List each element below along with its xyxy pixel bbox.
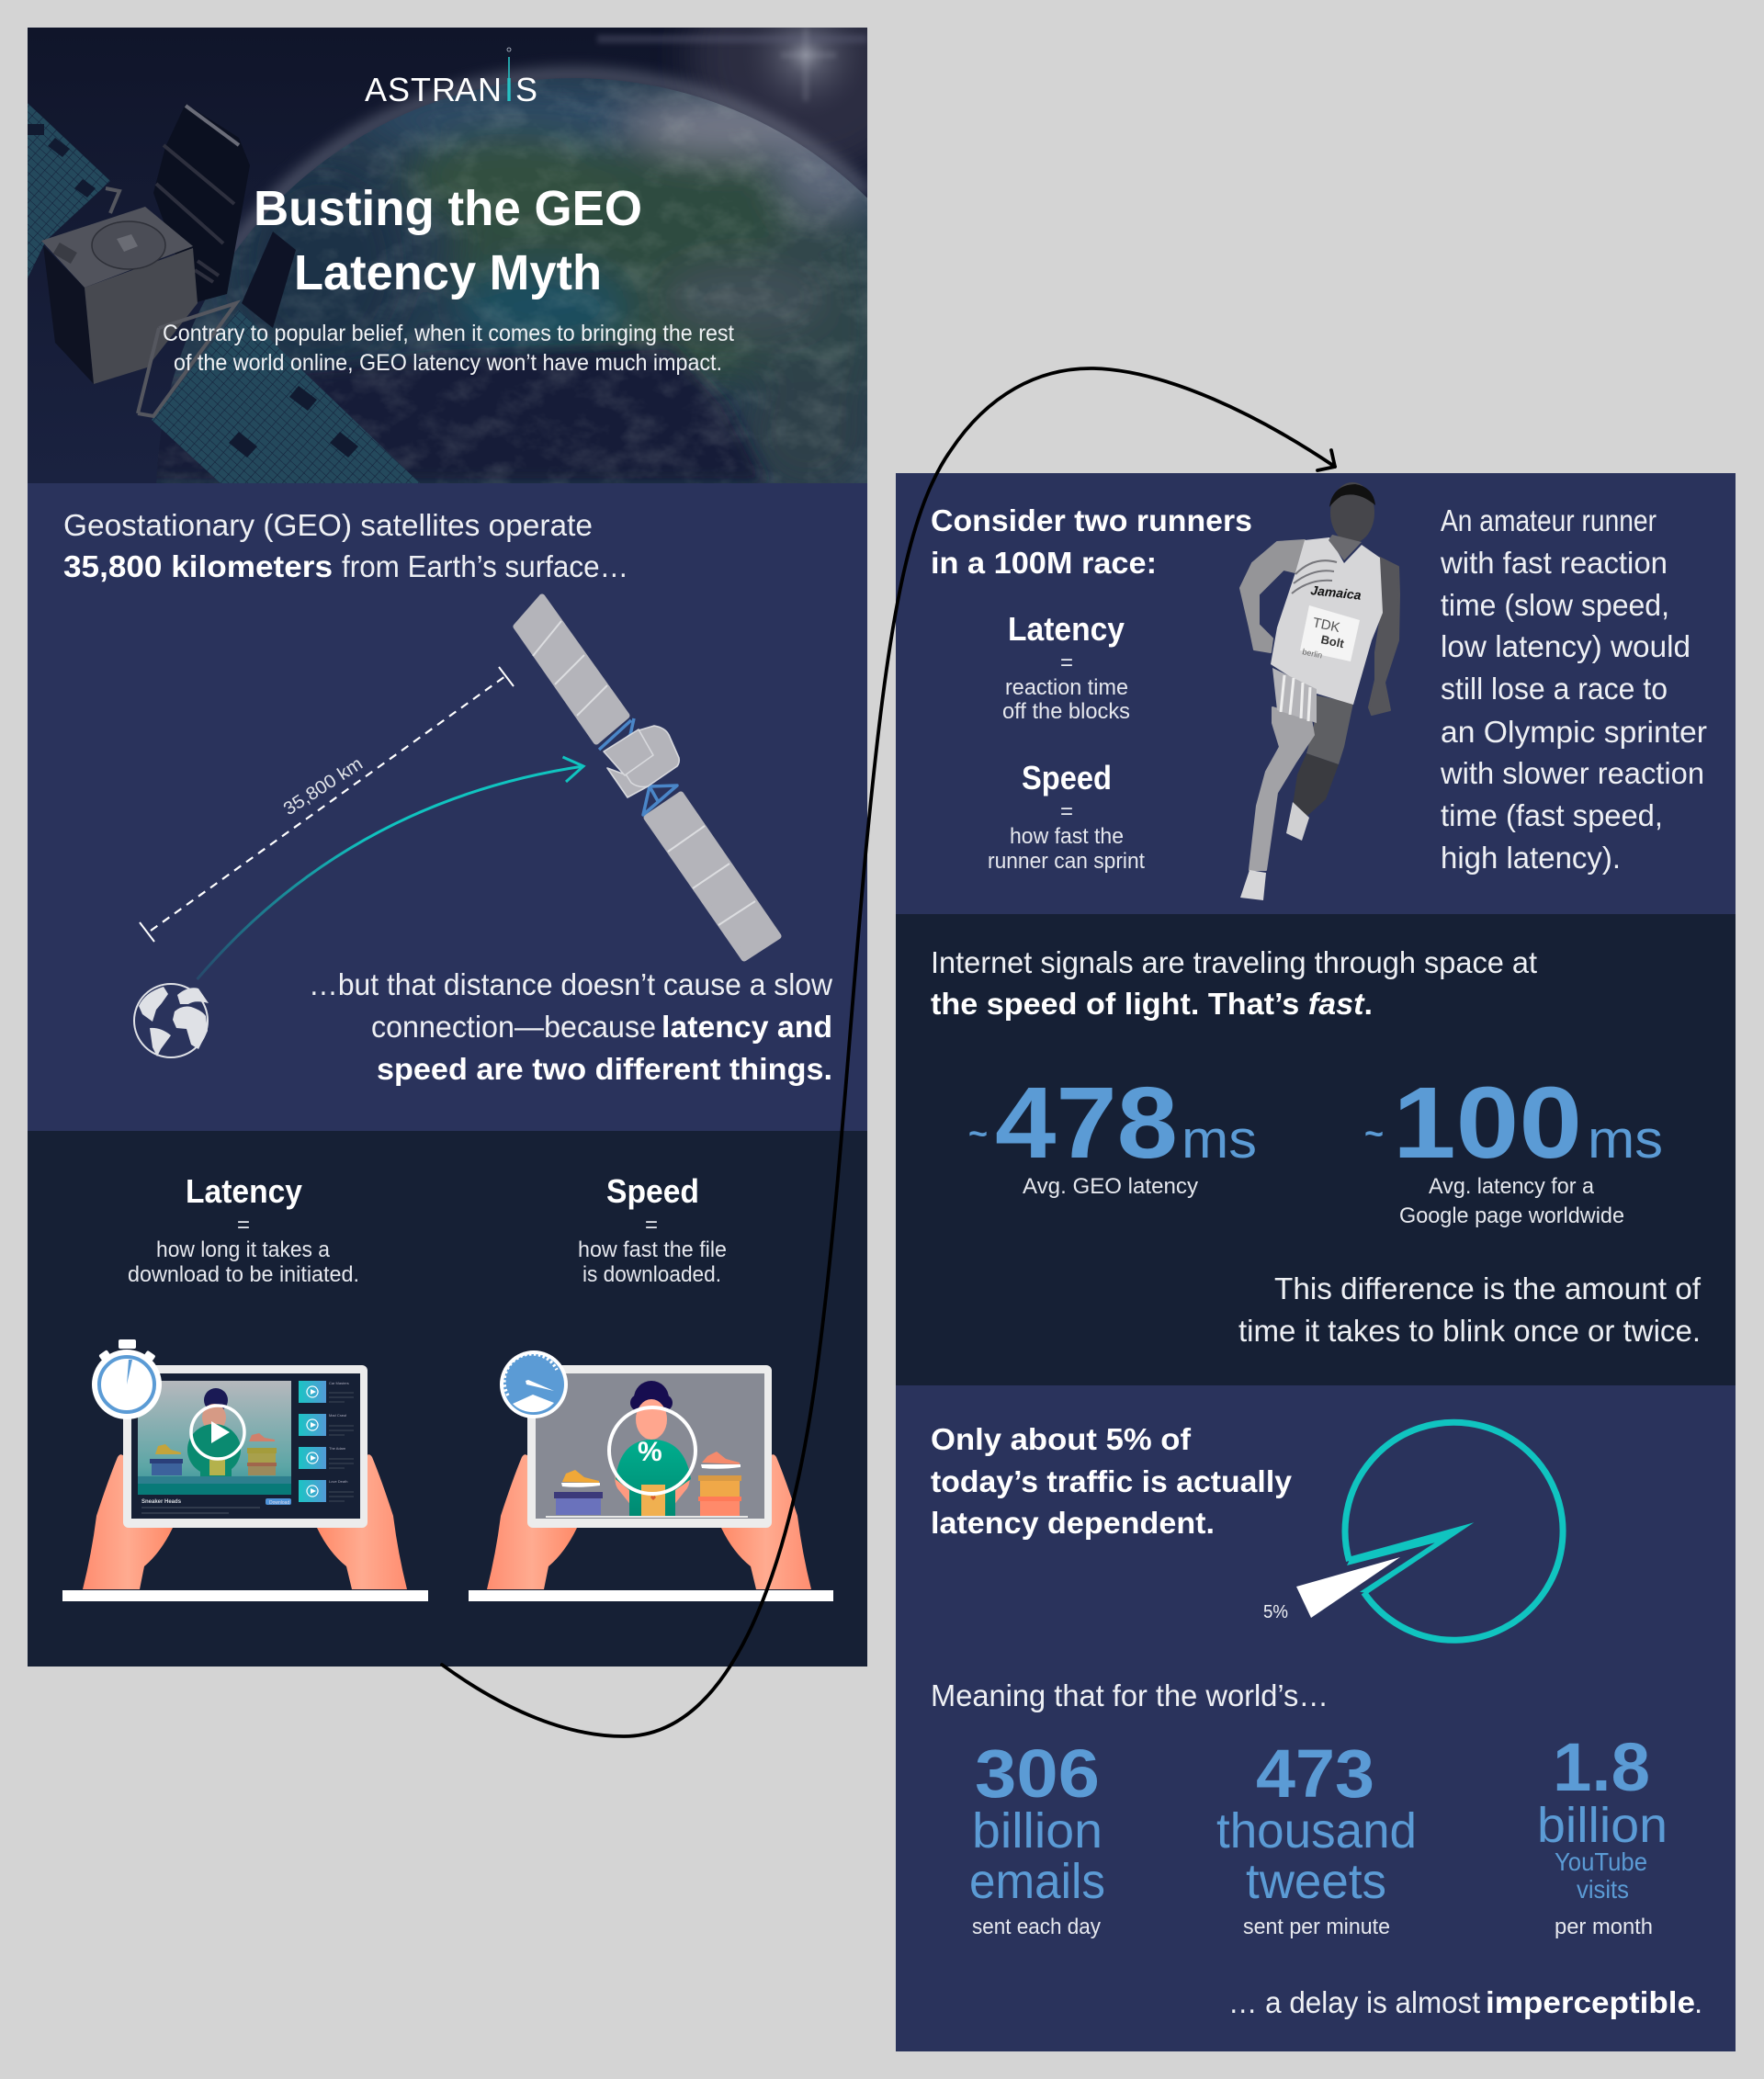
text: runner comparison: still lose a race to <box>1441 672 1668 706</box>
text: runner comparison: An amateur runner <box>1441 503 1657 537</box>
definition: runner speed: how fast the <box>1010 824 1124 849</box>
text: latency versus speed statement: connection—because <box>371 1010 656 1044</box>
heading: two runners: Consider two runners <box>931 503 1252 537</box>
chart: five percent pie <box>1263 1422 1563 1640</box>
stat: YouTube visits: visits <box>1577 1875 1629 1904</box>
text: runner comparison: with fast reaction <box>1440 546 1668 580</box>
icon: globe <box>134 984 209 1057</box>
stat: YouTube visits: per month <box>1555 1915 1653 1939</box>
definition: latency: how long it takes a <box>156 1237 331 1262</box>
race bib <box>1300 605 1360 661</box>
illustration: satellite in orbit <box>28 103 420 483</box>
stat: tweets: thousand <box>1216 1803 1417 1859</box>
definition: latency: = <box>237 1213 250 1237</box>
text: latency versus speed statement: speed are two different things. <box>377 1052 832 1086</box>
stat: Google latency: Avg. latency for a <box>1429 1174 1595 1199</box>
subtitle <box>163 321 734 376</box>
panel: speed of light <box>896 914 1736 1385</box>
heading: two runners <box>931 503 1252 580</box>
illustration: earth from orbit <box>156 28 867 483</box>
definition: runner latency <box>1002 610 1130 724</box>
subtitle: Contrary to popular belief, when it comes to bringing the rest <box>163 321 734 346</box>
video thumbnails: The Adam <box>329 1446 346 1451</box>
panel: traffic share <box>896 1385 1736 2051</box>
video thumbnails: Love Death <box>329 1479 347 1484</box>
text: traffic statement: latency dependent. <box>931 1506 1215 1540</box>
stat: GEO latency <box>968 1067 1257 1199</box>
text: conclusion <box>1228 1985 1702 2019</box>
text: meaning: Meaning that for the world’s… <box>931 1678 1329 1712</box>
panel: right column <box>896 473 1736 2051</box>
illustration: distance line <box>140 667 514 942</box>
race bib: berlin <box>1302 647 1323 661</box>
illustration: tablet with video and stopwatch <box>62 1339 428 1601</box>
video thumbnails: Car Masters <box>329 1381 349 1385</box>
definition: runner latency: = <box>1060 650 1073 675</box>
definition: runner speed: Speed <box>1022 759 1112 797</box>
text: latency versus speed statement: latency and <box>662 1010 832 1044</box>
panel: hero image <box>28 28 867 483</box>
text: runner comparison: low latency) would <box>1441 629 1690 663</box>
definition: runner latency: Latency <box>1008 610 1125 648</box>
definition: latency: download to be initiated. <box>128 1262 359 1287</box>
stat: emails: 306 <box>975 1735 1100 1812</box>
definition: runner speed: runner can sprint <box>988 849 1145 874</box>
video title row: Sneaker Heads <box>141 1499 182 1505</box>
stat: emails: sent each day <box>972 1915 1101 1939</box>
stat: GEO latency: 478 <box>995 1067 1178 1180</box>
panel: runner analogy <box>896 473 1736 914</box>
text: traffic statement <box>931 1422 1293 1540</box>
video thumbnails: Mad Crawl <box>329 1413 346 1418</box>
text: intro: 35,800 kilometers <box>63 549 333 583</box>
video person <box>150 1388 277 1476</box>
stat: GEO latency: Avg. GEO latency <box>1023 1174 1198 1199</box>
illustration: satellite <box>516 597 778 958</box>
text: traffic statement: today’s traffic is actually <box>931 1464 1293 1498</box>
title: Latency Myth <box>294 245 602 300</box>
stat: tweets: tweets <box>1246 1854 1386 1909</box>
text: speed of light: Internet signals are traveling through space at <box>931 945 1537 979</box>
stat: tweets: sent per minute <box>1243 1915 1390 1939</box>
definition: runner latency: off the blocks <box>1002 699 1130 724</box>
stat: GEO latency: ~ <box>968 1114 988 1152</box>
text: runner comparison <box>1440 503 1707 875</box>
stat: Google latency: Google page worldwide <box>1399 1203 1624 1228</box>
arrow: connector between columns <box>442 368 1335 1736</box>
logo: Astranis <box>365 48 537 108</box>
video thumbnails <box>299 1381 354 1502</box>
stat: Google latency: ~ <box>1364 1114 1384 1152</box>
stat: tweets <box>1216 1735 1417 1939</box>
text: runner comparison: time (slow speed, <box>1441 588 1669 622</box>
text: blink comparison: time it takes to blink once or twice. <box>1238 1314 1701 1348</box>
stat: GEO latency: ms <box>1182 1110 1257 1169</box>
stat: Google latency: ms <box>1588 1110 1663 1169</box>
store shoe boxes <box>546 1452 748 1518</box>
stat: YouTube visits: 1.8 <box>1553 1729 1650 1805</box>
stat: tweets: 473 <box>1256 1735 1374 1812</box>
icon: stopwatch <box>92 1339 162 1419</box>
text: blink comparison: This difference is the amount of <box>1274 1271 1702 1305</box>
chart: five percent pie: 5% <box>1263 1602 1288 1622</box>
text: runner comparison: an Olympic sprinter <box>1441 715 1707 749</box>
definition: speed: = <box>645 1213 658 1237</box>
store person: % <box>638 1437 662 1467</box>
stat: YouTube visits: YouTube <box>1555 1847 1647 1876</box>
text: speed of light: the speed of light. That’s fast. <box>931 987 1373 1021</box>
stat: emails: billion <box>972 1803 1102 1859</box>
stat: Google latency <box>1364 1067 1663 1228</box>
heading: two runners: in a 100M race: <box>931 546 1157 580</box>
text: intro: from Earth’s surface… <box>342 549 628 583</box>
definition: runner latency: reaction time <box>1005 675 1128 700</box>
illustration: tablet with store and gauge <box>469 1350 833 1601</box>
stat: emails: emails <box>969 1854 1105 1909</box>
definition: speed: is downloaded. <box>582 1262 721 1287</box>
definition: runner speed <box>988 759 1145 874</box>
panel: left column <box>28 28 867 1667</box>
panel: geostationary distance <box>28 483 867 1131</box>
text: intro <box>63 508 628 583</box>
title <box>254 181 642 300</box>
text: latency versus speed statement <box>309 967 832 1086</box>
video title row: Download <box>269 1500 289 1506</box>
stat: emails <box>969 1735 1105 1939</box>
subtitle: of the world online, GEO latency won’t have much impact. <box>174 350 722 376</box>
video title row <box>141 1498 291 1513</box>
text: latency versus speed statement: …but that distance doesn’t cause a slow <box>309 967 832 1001</box>
text: conclusion: imperceptible <box>1486 1985 1695 2019</box>
text: runner comparison: high latency). <box>1441 841 1621 875</box>
store person <box>609 1381 695 1516</box>
text: conclusion: . <box>1694 1985 1702 2019</box>
text: blink comparison <box>1238 1271 1702 1348</box>
illustration: distance line: 35,800 km <box>280 753 367 819</box>
text: runner comparison: with slower reaction <box>1440 756 1704 790</box>
title: Busting the GEO <box>254 181 642 236</box>
definition: runner speed: = <box>1060 799 1073 824</box>
definition: latency: Latency <box>186 1172 302 1210</box>
panel: latency and speed definitions <box>28 1131 867 1667</box>
definition: speed: how fast the file <box>578 1237 727 1262</box>
definition: speed: Speed <box>606 1172 699 1210</box>
definition: latency <box>128 1172 359 1287</box>
text: speed of light <box>931 945 1537 1021</box>
text: runner comparison: time (fast speed, <box>1441 798 1663 832</box>
illustration: sprinter <box>1240 482 1399 900</box>
definition: speed <box>578 1172 727 1287</box>
icon: speed gauge <box>500 1350 568 1418</box>
race bib: Bolt <box>1319 632 1346 650</box>
stat: YouTube visits: billion <box>1537 1798 1668 1853</box>
stat: Google latency: 100 <box>1393 1067 1582 1180</box>
race bib: TDK <box>1311 615 1341 636</box>
text: traffic statement: Only about 5% of <box>931 1422 1192 1456</box>
text: intro: Geostationary (GEO) satellites operate <box>63 508 593 542</box>
stat: YouTube visits <box>1537 1729 1668 1939</box>
arrow: signal arc <box>197 757 583 979</box>
logo: Astranis: ASTRANIS <box>365 71 537 108</box>
illustration: sprinter: Jamaica <box>1310 582 1363 603</box>
text: conclusion: … a delay is almost <box>1228 1985 1480 2019</box>
